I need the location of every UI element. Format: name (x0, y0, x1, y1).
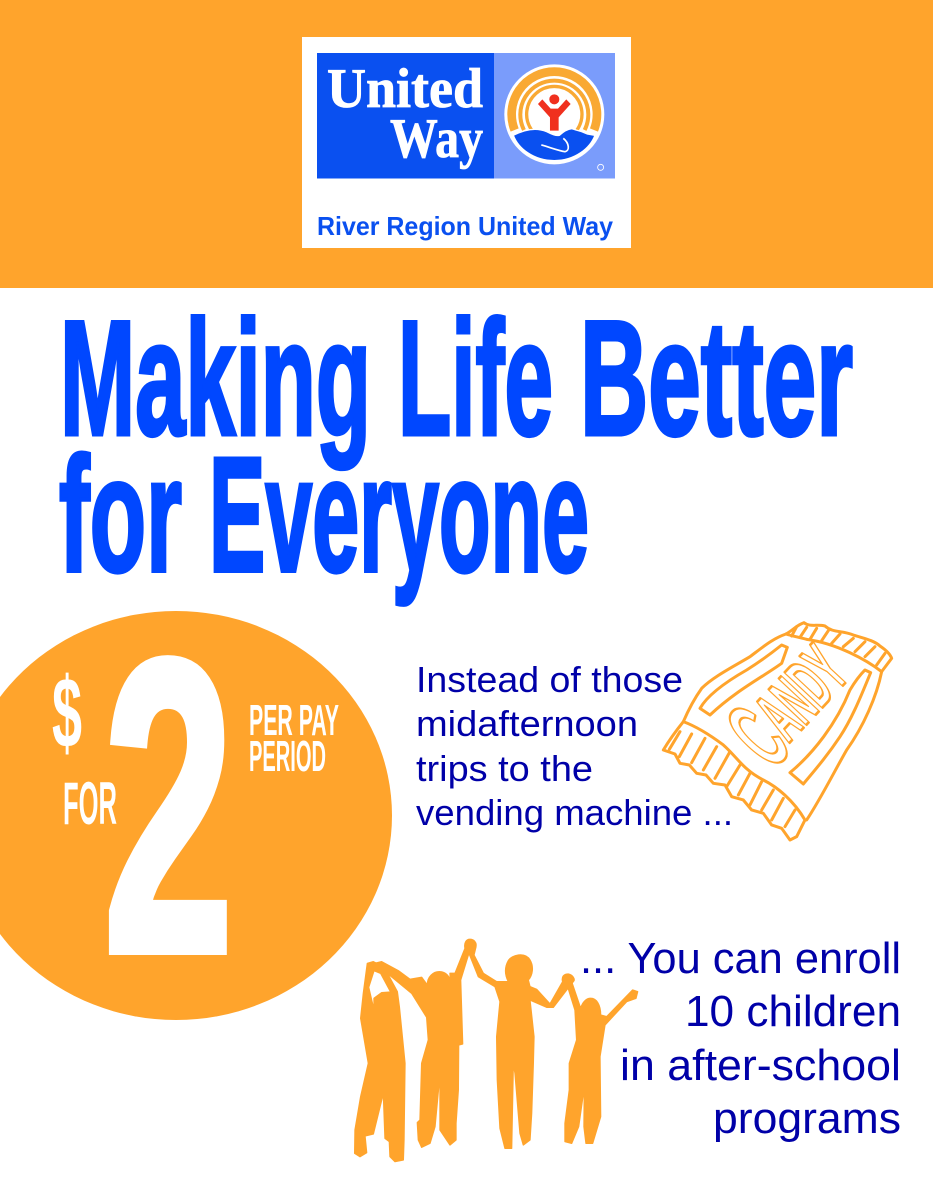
big number 2: 2 (103, 573, 234, 1040)
per pay period label: PERIOD (249, 732, 326, 781)
header band (0, 0, 933, 288)
logo wordmark panel: Way (390, 108, 483, 170)
text: after-school programs (580, 935, 901, 1143)
text: vending machine: vending machine ... (416, 792, 733, 833)
title: Making (60, 286, 371, 470)
logo card (302, 37, 631, 248)
text: vending machine: midafternoon (416, 703, 638, 744)
logo wordmark panel (317, 53, 494, 178)
logo wordmark panel: United (327, 58, 483, 120)
adult 3 (468, 945, 574, 1148)
child 2 (375, 939, 476, 1147)
text: vending machine: trips to the (416, 748, 593, 789)
title (59, 286, 853, 606)
icon: candy bag: C (706, 687, 810, 786)
text: vending machine (416, 659, 733, 833)
text: after-school programs: 10 children (685, 988, 901, 1036)
per pay period label (249, 696, 339, 781)
price circle: PER PAY (249, 696, 339, 745)
logo caption: River Region United Way (317, 211, 614, 241)
icon: children silhouettes (355, 939, 638, 1162)
icon: candy bag (663, 620, 892, 840)
text: after-school programs: ... You can enroll (580, 935, 901, 983)
text: after-school programs: programs (713, 1095, 901, 1143)
text: after-school programs: in after-school (620, 1042, 901, 1090)
dollar sign: $ (52, 657, 82, 769)
price circle: FOR (63, 770, 117, 837)
title: Life (398, 286, 553, 470)
price circle (0, 573, 392, 1040)
child 4 (565, 982, 638, 1143)
title: for (59, 423, 182, 606)
title: Everyone (209, 423, 589, 606)
text: vending machine: Instead of those (416, 659, 683, 700)
child 1 (355, 962, 405, 1162)
logo symbol panel (494, 53, 615, 178)
